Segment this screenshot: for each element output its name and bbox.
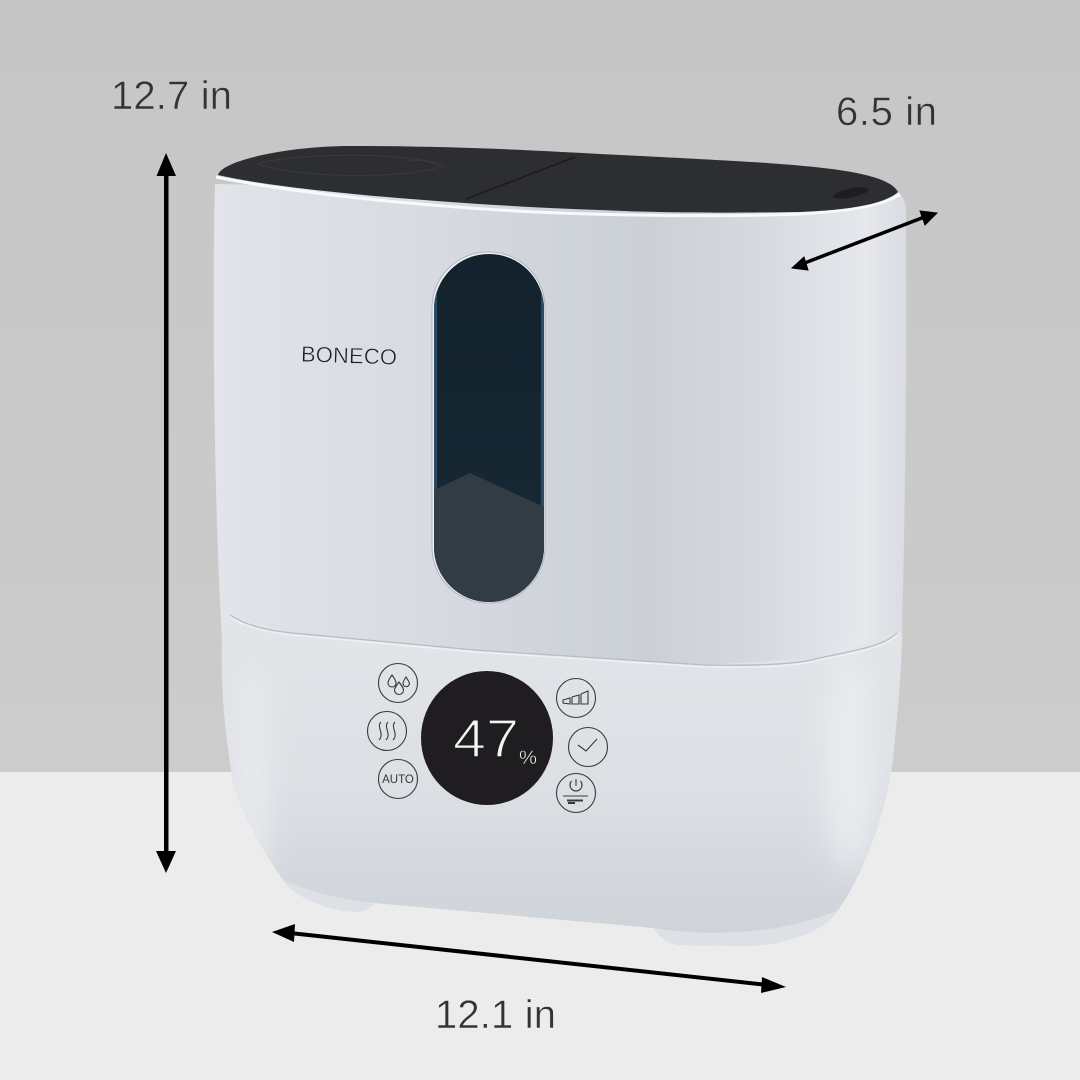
height arrow [156, 153, 176, 873]
button: confirm [568, 728, 608, 766]
width label: 12.1 in [435, 993, 556, 1037]
display circle [421, 671, 553, 805]
seam highlight [230, 617, 897, 667]
background floor [0, 772, 1080, 1080]
width arrow [272, 924, 786, 993]
depth arrow [792, 211, 937, 270]
button: mist drops [378, 664, 418, 702]
seam between tank and base [230, 615, 897, 665]
dark top lid [218, 146, 898, 213]
lid handle slot [832, 185, 870, 201]
display reading: 47 [453, 709, 519, 769]
depth label: 6.5 in [836, 90, 937, 134]
button: auto: AUTO [382, 774, 414, 786]
humidifier body [205, 170, 915, 960]
brand logo: BONECO [301, 341, 397, 370]
height label: 12.7 in [111, 74, 232, 118]
lid detail lines [258, 155, 575, 199]
water window [432, 252, 545, 610]
dimension: width [272, 924, 786, 1037]
dimension: depth [792, 90, 937, 270]
display percent: % [519, 748, 537, 769]
button: auto [378, 760, 418, 798]
white rim under lid [216, 177, 900, 216]
background wall [0, 0, 1080, 772]
control buttons [368, 664, 608, 812]
dimension: height [111, 74, 232, 873]
button: fan level [556, 678, 596, 718]
button: power [556, 774, 596, 812]
button: warm mist [368, 712, 406, 750]
humidifier product [205, 146, 915, 960]
